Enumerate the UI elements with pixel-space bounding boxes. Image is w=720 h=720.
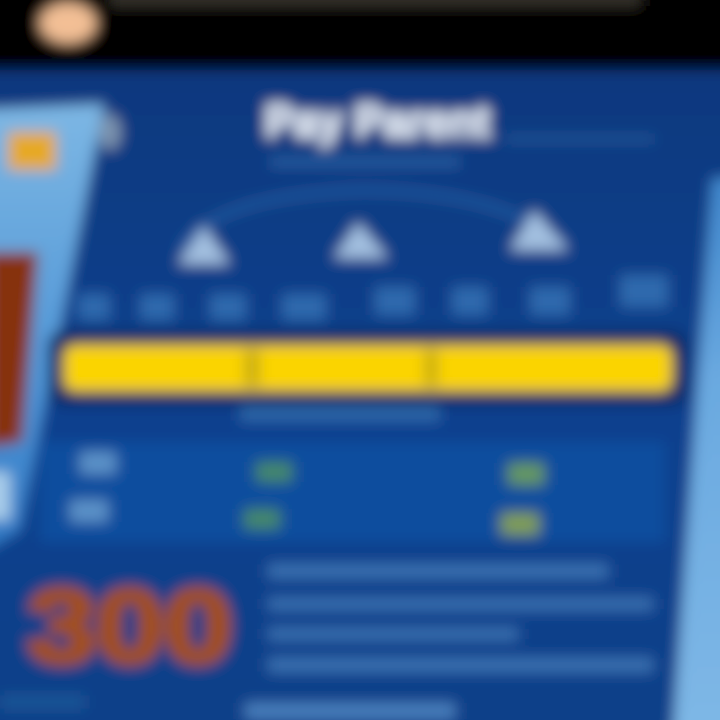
badge: yellow tag (8, 132, 56, 170)
icon: peach lamp (40, 3, 96, 43)
top dark band (0, 0, 720, 70)
highlight: yellow bar (64, 345, 672, 391)
diagram: eight child nodes (78, 275, 668, 320)
small tag beside left card (99, 114, 121, 150)
panel: left light-blue card (0, 104, 104, 560)
text block (245, 564, 653, 719)
diagram: three parent nodes (178, 210, 568, 264)
big number: 300 (28, 569, 232, 685)
table: labels (70, 452, 544, 535)
photo: orange image (0, 252, 38, 448)
table: green values (256, 462, 292, 482)
subtitle line (270, 136, 655, 166)
panel: lower lighter band (40, 442, 665, 542)
dark shadow around yellow bar (48, 330, 688, 406)
caption under bar (240, 407, 440, 421)
footer label (0, 695, 85, 709)
title: Pay Parent (265, 95, 490, 147)
panel: right light-blue strip (672, 178, 720, 720)
diagram: tree connectors (180, 190, 565, 250)
